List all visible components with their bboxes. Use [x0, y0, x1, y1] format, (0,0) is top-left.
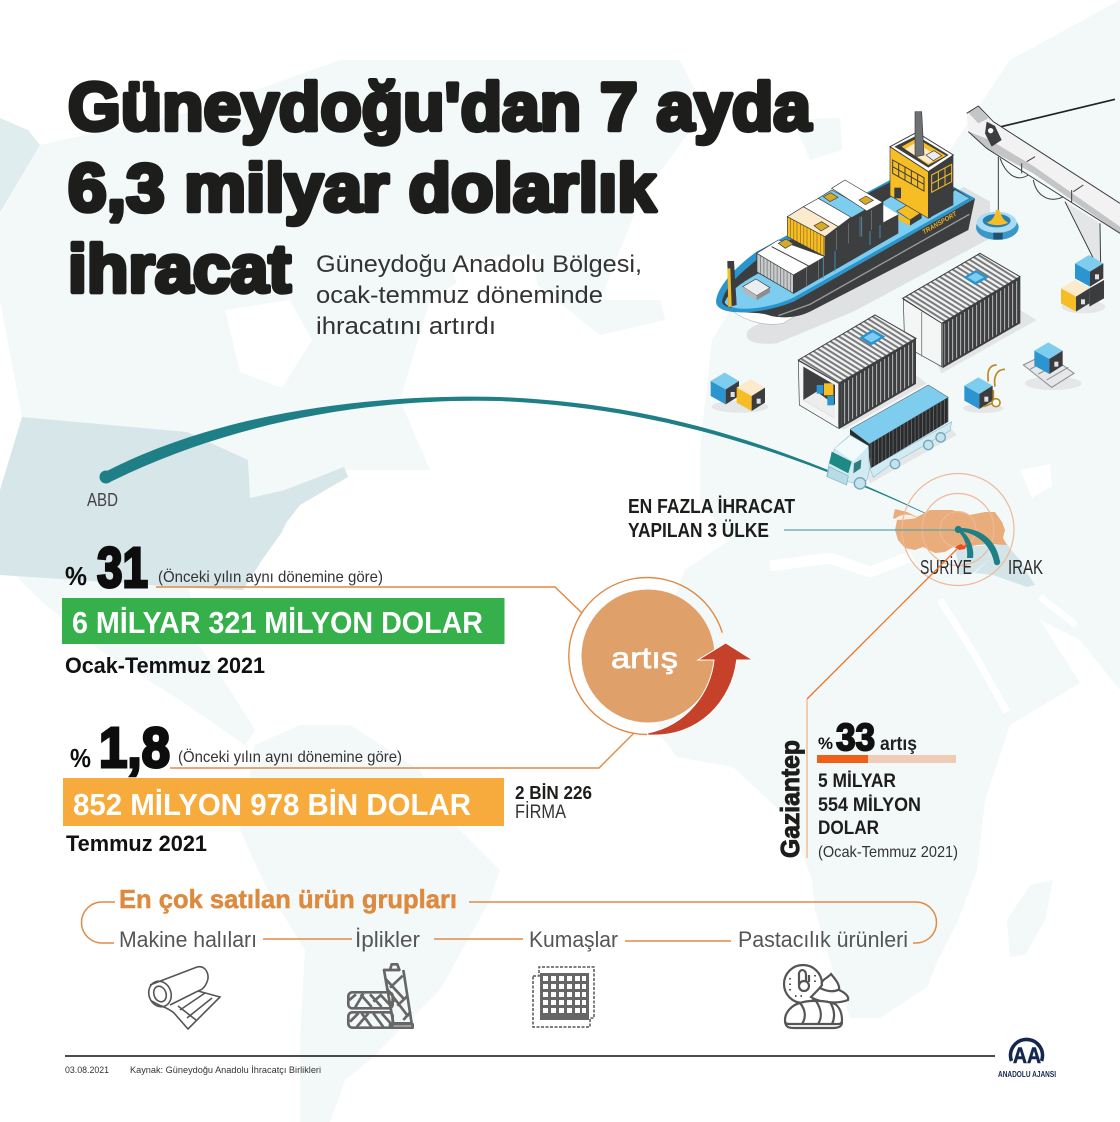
company count: FİRMA [515, 802, 566, 823]
title: 6,3 milyar dolarlık [68, 150, 656, 226]
growth figure [818, 717, 917, 759]
bow mast [727, 261, 737, 307]
icon: yarn [348, 964, 413, 1028]
period: Temmuz 2021 [66, 831, 207, 856]
period: Ocak-Temmuz 2021 [65, 653, 265, 678]
product names [119, 927, 908, 952]
icon: fabric [533, 967, 594, 1027]
bridge tower [890, 147, 928, 218]
percent 31: % [65, 561, 87, 591]
product names: İplikler [355, 927, 420, 952]
growth figure: 33 [836, 717, 875, 759]
route arc from ABD to Turkey [100, 397, 958, 529]
truck [827, 385, 957, 489]
value [818, 771, 921, 839]
map: Turkey with radar circles and routes [784, 474, 1035, 587]
labels: Suriye and Irak [920, 556, 1043, 579]
connector: Gaziantep [807, 549, 957, 858]
city name: Gaziantep [775, 740, 805, 858]
progress bar [817, 755, 956, 763]
company count [515, 783, 592, 823]
product names: Kumaşlar [529, 927, 618, 952]
circle: artış with rising arrow [569, 578, 753, 735]
hanging cargo boxes [1061, 255, 1105, 313]
footer rule [65, 1055, 995, 1057]
heading: top three countries: EN FAZLA İHRACAT [628, 495, 795, 518]
container back [903, 253, 1037, 373]
subtitle: ihracatını artırdı [316, 313, 496, 340]
growth figure: artış [880, 734, 917, 755]
frame lines [82, 902, 936, 943]
value: DOLAR [818, 818, 879, 839]
cargo containers [757, 240, 825, 275]
comparison note: (Önceki yılın aynı dönemine göre) [158, 568, 383, 586]
logo: Anadolu Ajansı [998, 1039, 1056, 1079]
percent 1,8 [70, 716, 170, 780]
subtitle [316, 251, 642, 340]
growth figure: % [818, 734, 833, 753]
subtitle: Güneydoğu Anadolu Bölgesi, [316, 251, 642, 278]
product names: Pastacılık ürünleri [738, 927, 908, 952]
heading: top three countries [628, 495, 795, 542]
panel: Gaziantep [775, 717, 958, 861]
deck boxes [743, 279, 770, 296]
green value bar: 6 MİLYAR 321 MİLYON DOLAR [72, 605, 483, 640]
percent 1,8: % [70, 743, 91, 773]
percent 31: 31 [97, 536, 148, 600]
value: 554 MİLYON [818, 795, 921, 816]
period: (Ocak-Temmuz 2021) [818, 844, 958, 861]
illustration: port with ship, crane, containers and truck [711, 99, 1120, 489]
labels: Suriye and Irak: IRAK [1008, 557, 1043, 579]
heading: top three countries: YAPILAN 3 ÜLKE [628, 519, 769, 542]
subtitle: ocak-temmuz döneminde [316, 282, 603, 309]
hand truck with box [963, 365, 1005, 413]
section heading: En çok satılan ürün grupları [119, 884, 457, 914]
logo: Anadolu Ajansı: ANADOLU AJANSI [998, 1069, 1056, 1079]
small cargo: blue and yellow boxes [711, 373, 768, 413]
pallet with box [1023, 342, 1082, 390]
icon: carpet roll [145, 967, 220, 1029]
company count: 2 BİN 226 [515, 783, 592, 803]
panel: January-July figures [62, 536, 504, 678]
title: ihracat [68, 231, 291, 307]
percent 31 [65, 536, 148, 600]
buoy [976, 210, 1019, 240]
value: 5 MİLYAR [818, 771, 896, 792]
percent 1,8: 1,8 [99, 716, 170, 780]
circle: artış with rising arrow: artış [611, 642, 678, 675]
product names: Makine halıları [119, 927, 257, 952]
title [68, 69, 812, 307]
logo: Anadolu Ajansı: AA [1013, 1043, 1041, 1068]
panel: July figures [63, 716, 592, 856]
crane [967, 99, 1120, 267]
orange value bar [63, 778, 504, 826]
connector lines to circle [156, 587, 634, 768]
ship [716, 112, 990, 344]
comparison note: (Önceki yılın aynı dönemine göre) [178, 748, 402, 766]
title: Güneydoğu'dan 7 ayda [68, 69, 812, 145]
footer: date and source: 03.08.2021 [65, 1065, 109, 1075]
ship name: TRANSPORT [921, 210, 959, 236]
labels: Suriye and Irak: SURİYE [920, 556, 972, 579]
orange value bar: 852 MİLYON 978 BİN DOLAR [73, 787, 471, 822]
label: ABD: ABD [87, 490, 118, 510]
icon: pastry [784, 965, 848, 1028]
footer: date and source: Kaynak: Güneydoğu Anadolu İhracatçı Birlikleri [130, 1065, 321, 1075]
panel: top product groups [82, 884, 936, 1029]
container front open [798, 315, 927, 430]
